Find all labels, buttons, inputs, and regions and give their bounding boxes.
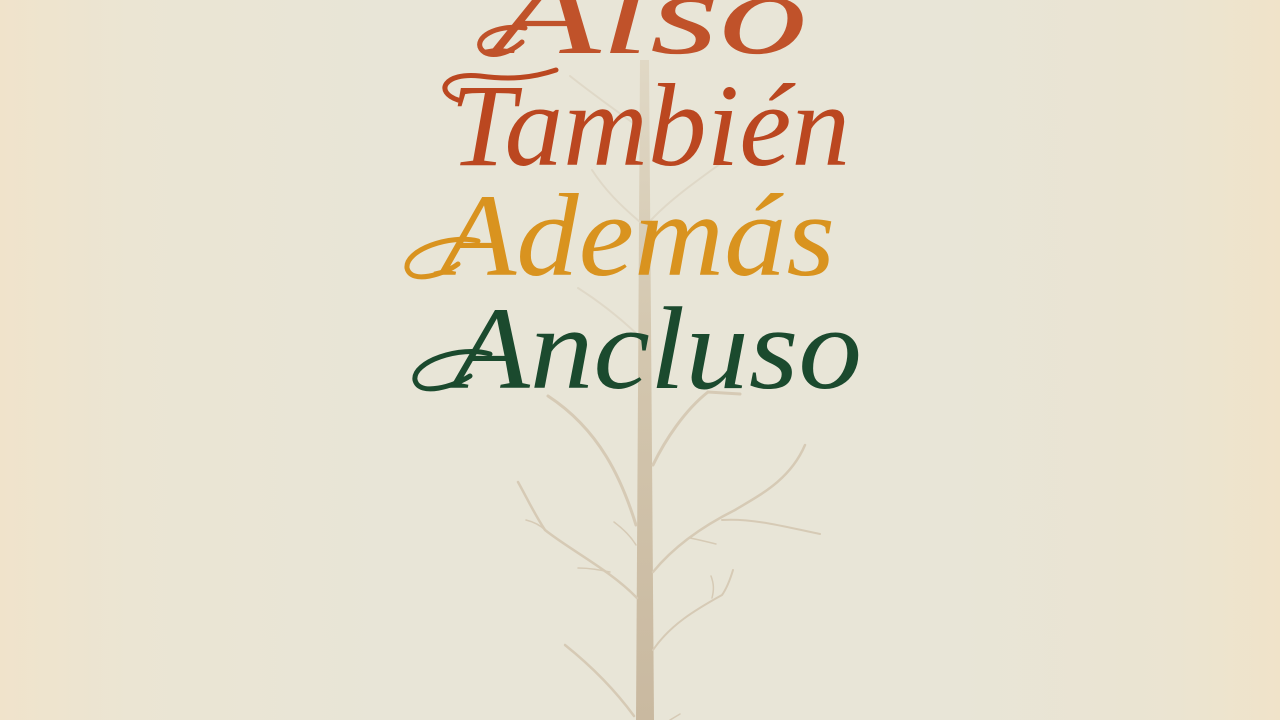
word: Además: Además (433, 170, 835, 301)
word: Also (480, 0, 808, 79)
flourish: También swash (445, 70, 556, 100)
lower right branches (653, 392, 820, 720)
icon: bare tree (518, 60, 820, 720)
flourish: Also swash (480, 27, 525, 55)
word: También: También (450, 60, 850, 191)
upper branches (570, 76, 720, 335)
flourish: Además swash (407, 239, 478, 277)
lower left branches (518, 396, 637, 716)
tree trunk (636, 60, 654, 720)
word: Ancluso: Ancluso (444, 283, 862, 414)
flourish: Ancluso swash (415, 352, 490, 389)
